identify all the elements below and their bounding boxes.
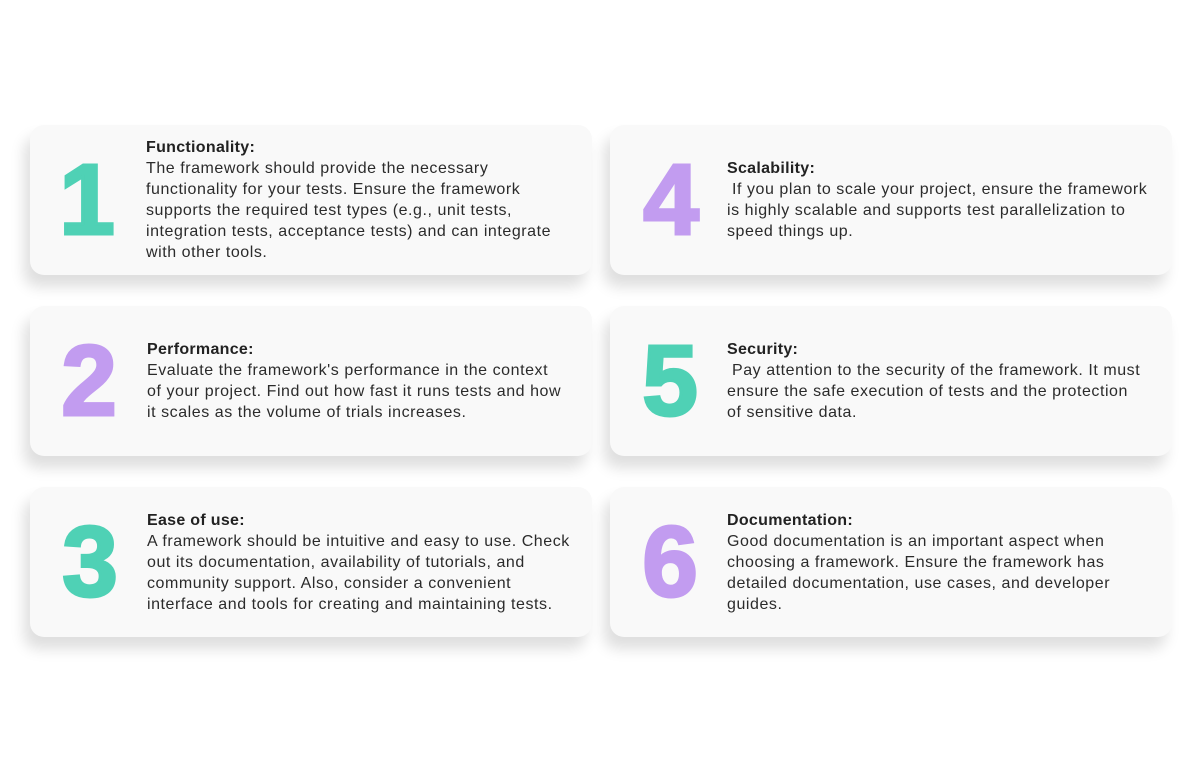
card 2: performance bbox=[30, 306, 592, 456]
text: functionality: The framework should provide the necessary bbox=[146, 160, 488, 177]
text: ease of use: interface and tools for creating and maintaining tests. bbox=[147, 596, 553, 612]
card 1: functionality bbox=[30, 125, 592, 275]
text: performance: Evaluate the framework's performance in the context bbox=[147, 362, 548, 379]
text: scalability: If you plan to scale your project, ensure the framework bbox=[732, 181, 1147, 198]
text: functionality: supports the required test types (e.g., unit tests, bbox=[146, 202, 512, 219]
text: functionality: integration tests, acceptance tests) and can integrate bbox=[146, 223, 551, 240]
number 6: 6 bbox=[642, 506, 698, 618]
text: functionality: with other tools. bbox=[146, 244, 267, 261]
number 1: 1 bbox=[59, 144, 115, 256]
card 3: ease of use bbox=[30, 487, 592, 637]
text: documentation bbox=[727, 512, 1110, 612]
text: documentation: choosing a framework. Ensure the framework has bbox=[727, 554, 1104, 570]
text: ease of use: community support. Also, consider a convenient bbox=[147, 574, 511, 592]
card 5: security bbox=[610, 306, 1172, 456]
text: performance: Performance: bbox=[147, 341, 254, 358]
text: performance: it scales as the volume of trials increases. bbox=[147, 404, 466, 421]
text: performance: of your project. Find out how fast it runs tests and how bbox=[147, 383, 561, 400]
text: functionality: Functionality: bbox=[146, 139, 255, 156]
number 3: 3 bbox=[62, 506, 118, 618]
number 5: 5 bbox=[642, 325, 698, 437]
text: scalability: is highly scalable and supports test parallelization to bbox=[727, 202, 1125, 219]
number 2: 2 bbox=[61, 325, 117, 437]
card 4: scalability bbox=[610, 125, 1172, 275]
text: ease of use: out its documentation, availability of tutorials, and bbox=[147, 554, 525, 570]
text: performance bbox=[147, 341, 561, 421]
text: documentation: Good documentation is an important aspect when bbox=[727, 532, 1105, 550]
number 4: 4 bbox=[643, 144, 699, 256]
text: security: Security: bbox=[727, 341, 798, 358]
text: documentation: detailed documentation, use cases, and developer bbox=[727, 574, 1110, 592]
text: security: Pay attention to the security of the framework. It must bbox=[732, 362, 1140, 379]
text: security: of sensitive data. bbox=[727, 404, 857, 421]
text: documentation: guides. bbox=[727, 596, 782, 612]
text: functionality bbox=[146, 139, 551, 261]
text: ease of use: A framework should be intuitive and easy to use. Check bbox=[147, 532, 570, 550]
card 6: documentation bbox=[610, 487, 1172, 637]
text: documentation: Documentation: bbox=[727, 512, 853, 528]
text: scalability: speed things up. bbox=[727, 223, 853, 240]
text: scalability bbox=[727, 160, 1147, 240]
text: ease of use: Ease of use: bbox=[147, 512, 245, 528]
text: functionality: functionality for your tests. Ensure the framework bbox=[146, 181, 520, 198]
text: ease of use bbox=[147, 512, 570, 612]
text: security: ensure the safe execution of tests and the protection bbox=[727, 383, 1128, 400]
text: scalability: Scalability: bbox=[727, 160, 815, 177]
text: security bbox=[727, 341, 1140, 421]
